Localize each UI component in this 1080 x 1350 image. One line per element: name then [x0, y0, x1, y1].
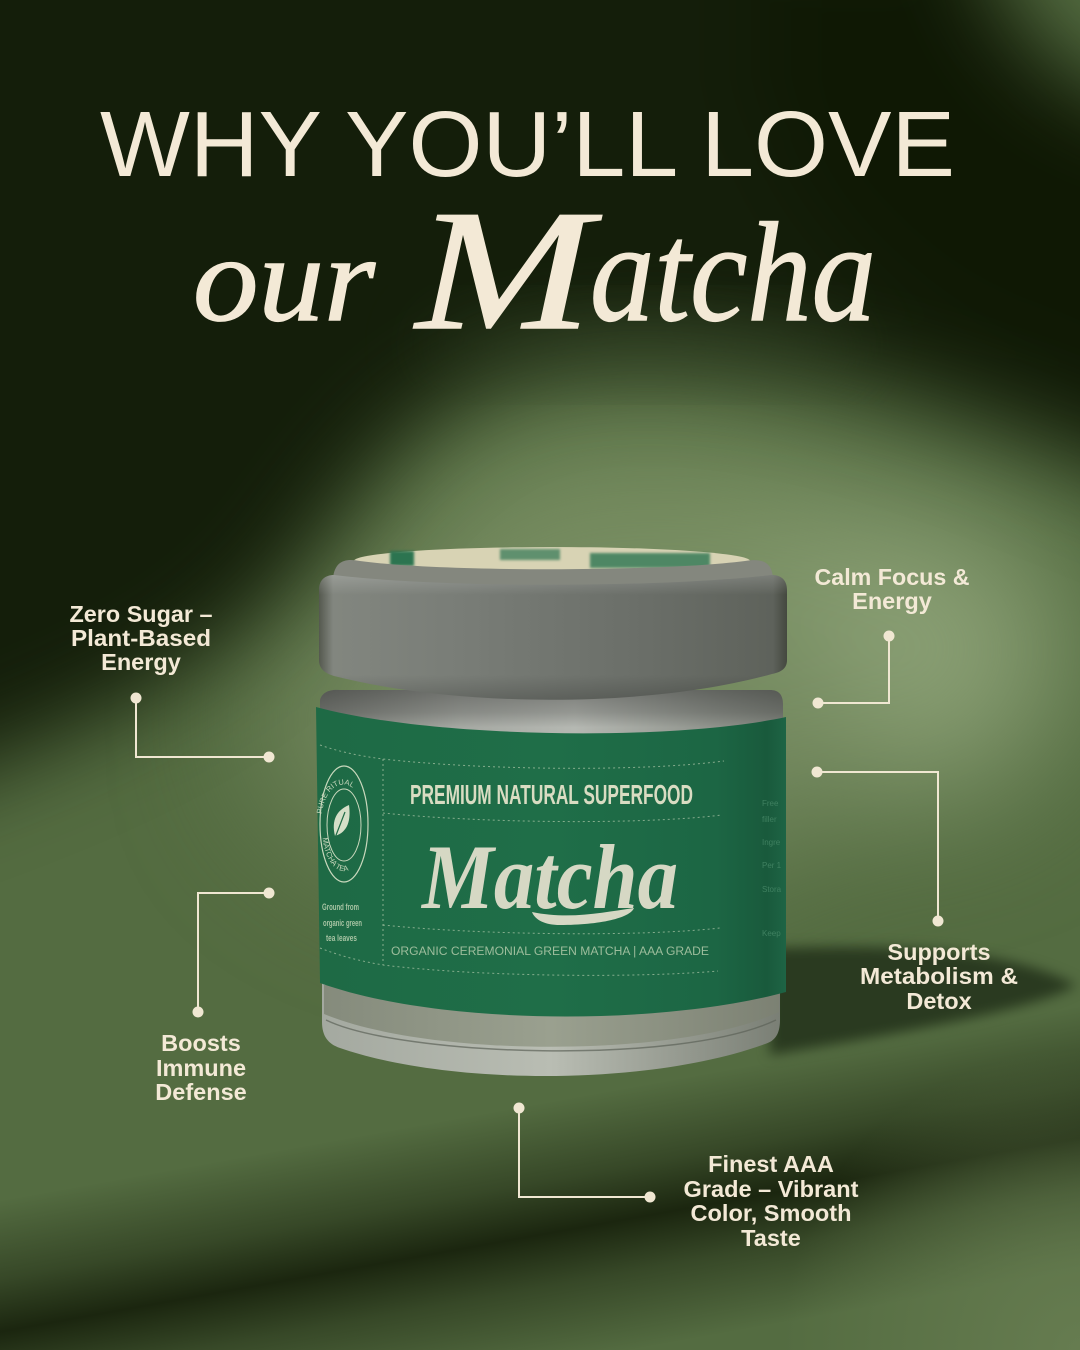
lid band — [319, 575, 787, 700]
label right side faint text: Stora — [762, 885, 782, 894]
top and left shadow — [0, 0, 1080, 830]
callout: Supports Metabolism: Supports — [887, 939, 991, 965]
tin base — [322, 980, 780, 1076]
label right side faint text: Per 1 — [762, 861, 782, 870]
bottom right light — [700, 1050, 1080, 1350]
bottom diagonal shadow band — [0, 1000, 1080, 1350]
callout: Supports Metabolism: Detox — [906, 988, 972, 1014]
soft lift behind script title — [420, 315, 860, 375]
label right side faint text: filler — [762, 815, 777, 824]
callout: Boosts Immune — [155, 888, 274, 1105]
callout: Zero Sugar — [70, 601, 274, 762]
script title: our Matcha: M — [412, 176, 603, 366]
callout: Calm Focus — [812, 564, 970, 708]
callout: Boosts Immune: Immune — [156, 1055, 246, 1081]
matcha tin — [316, 547, 787, 1076]
label right side faint text: Keep — [762, 929, 781, 938]
label small side text: Ground from — [322, 902, 359, 912]
callout: Supports Metabolism: Metabolism & — [860, 963, 1018, 989]
label round leaf badge — [316, 765, 369, 883]
label right side faint text: Ingre — [762, 838, 781, 847]
script title: our Matcha: atcha — [590, 193, 876, 351]
label round leaf badge: PURE RITUAL — [316, 779, 353, 814]
title line: WHY YOU'LL LOVE: WHY YOU’LL LOVE — [100, 92, 955, 196]
script title: our Matcha — [193, 176, 876, 366]
label small side text — [322, 902, 362, 943]
jar cast shadow — [770, 947, 1076, 1055]
lid top with cream label — [333, 547, 773, 590]
callout: Finest AAA — [514, 1102, 859, 1251]
callout: Finest AAA: Color, Smooth — [690, 1200, 852, 1226]
label tagline: ORGANIC CEREMONIAL GREEN MATCHA | AAA GRADE — [391, 946, 709, 958]
label right side faint text — [762, 799, 782, 938]
callout: Finest AAA: Taste — [741, 1225, 801, 1251]
label script: Matcha: Matcha — [420, 826, 678, 928]
callout: Calm Focus: Energy — [852, 588, 932, 614]
green label — [316, 707, 786, 1016]
callout: Zero Sugar: Plant-Based — [71, 625, 211, 651]
callout: Finest AAA: Grade – Vibrant — [684, 1176, 859, 1202]
label heading: PREMIUM NATURAL SUPERFOOD: PREMIUM NATURAL SUPERFOOD — [410, 779, 693, 810]
label small side text: tea leaves — [326, 933, 357, 943]
callout: Calm Focus: Calm Focus & — [814, 564, 970, 590]
label round leaf badge: MATCHA TEA — [322, 838, 349, 872]
callout: Boosts Immune: Boosts — [161, 1030, 241, 1056]
callout: Finest AAA: Finest AAA — [708, 1151, 834, 1177]
label small side text: organic green — [323, 918, 362, 928]
tin neck — [320, 690, 783, 740]
label right side faint text: Free — [762, 799, 779, 808]
label dotted frame — [320, 745, 724, 975]
script title: our Matcha: our — [193, 212, 376, 347]
callout: Zero Sugar: Zero Sugar – — [70, 601, 212, 627]
callout: Supports Metabolism — [812, 766, 1018, 1014]
callout: Boosts Immune: Defense — [155, 1079, 247, 1105]
callout: Zero Sugar: Energy — [101, 649, 181, 675]
